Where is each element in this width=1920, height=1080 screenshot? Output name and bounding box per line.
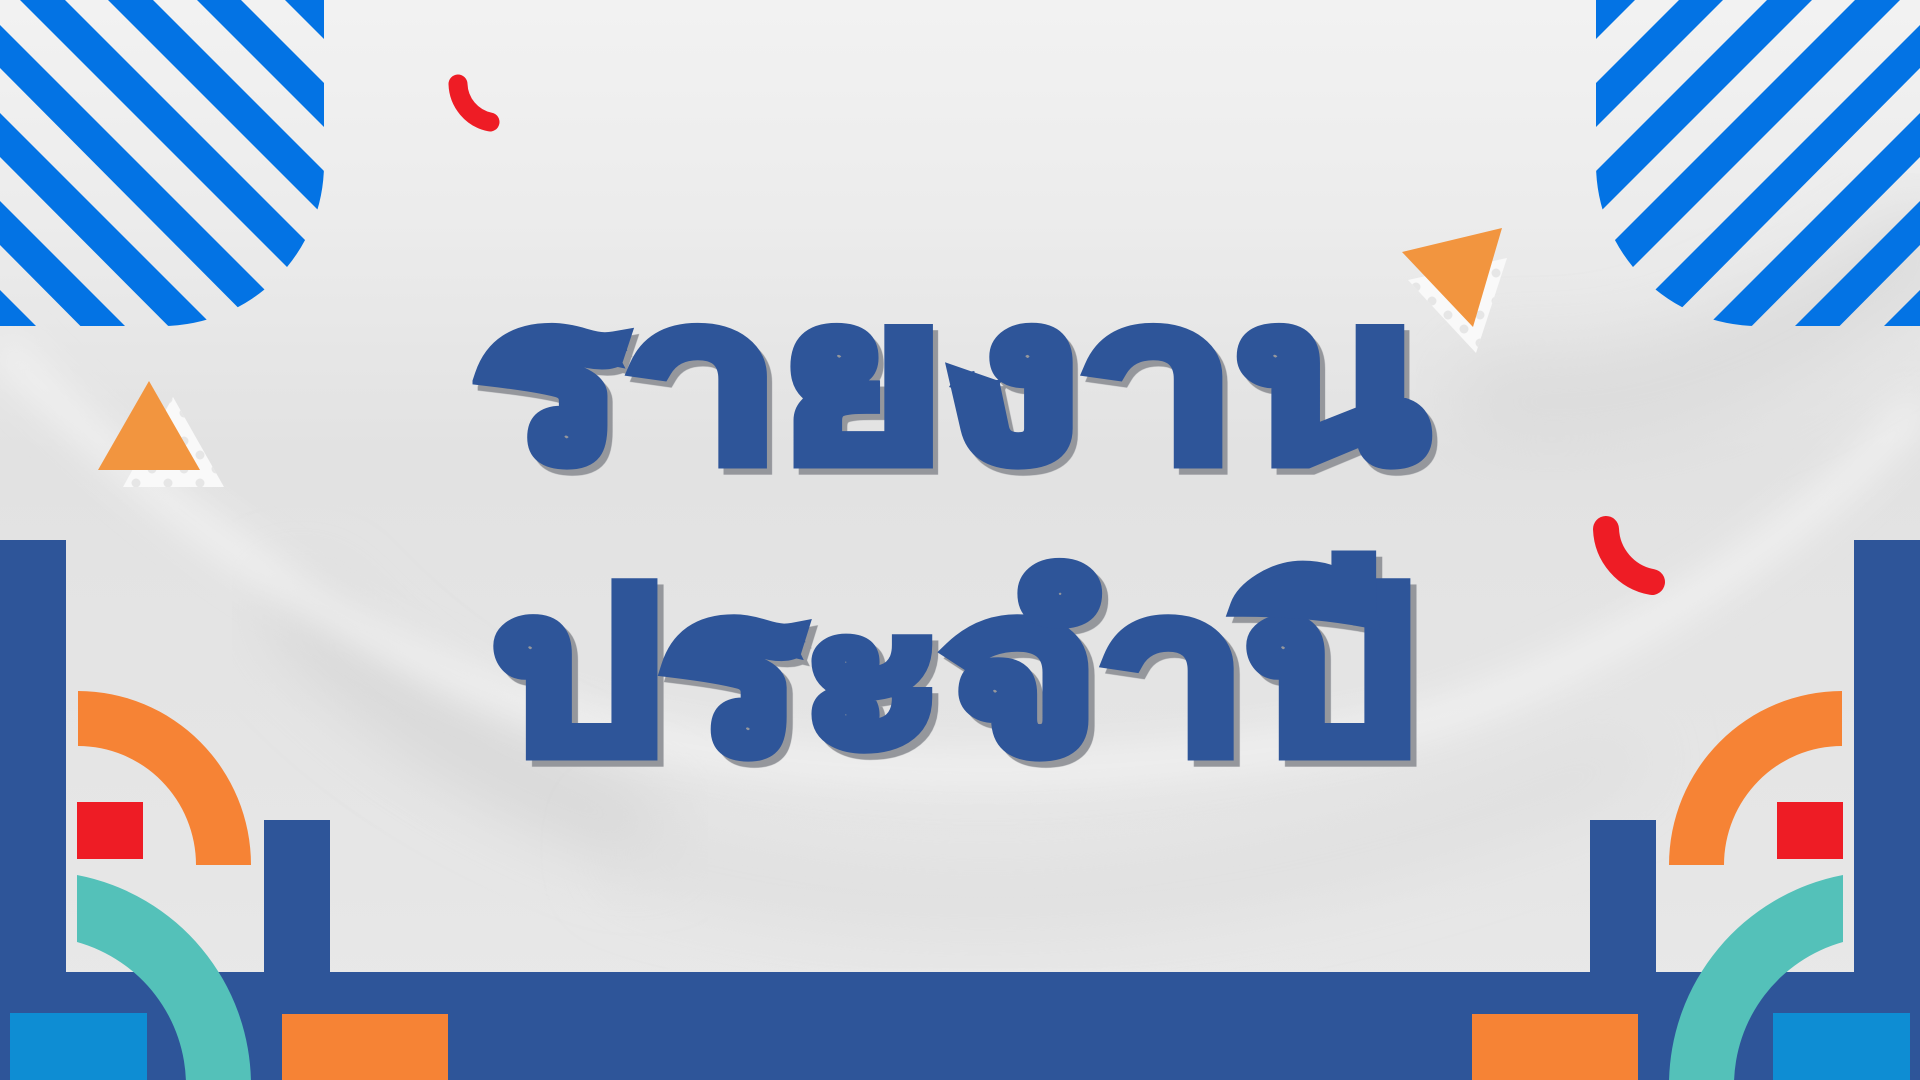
title line 1: รายงาน bbox=[474, 257, 1426, 505]
icon: triangle left bbox=[98, 381, 224, 487]
footer band bbox=[0, 972, 1920, 1080]
icon: red arc right bbox=[1606, 529, 1652, 582]
stripes: top left bbox=[0, 0, 400, 380]
icon: red arc left bbox=[458, 84, 490, 122]
bars and arcs: bottom left bbox=[0, 540, 448, 1080]
stripes: top right bbox=[1520, 0, 1920, 380]
title line 2: ประจำปี bbox=[493, 548, 1413, 797]
icon: triangle right bbox=[1402, 228, 1507, 353]
bars and arcs: bottom right bbox=[1472, 540, 1920, 1080]
